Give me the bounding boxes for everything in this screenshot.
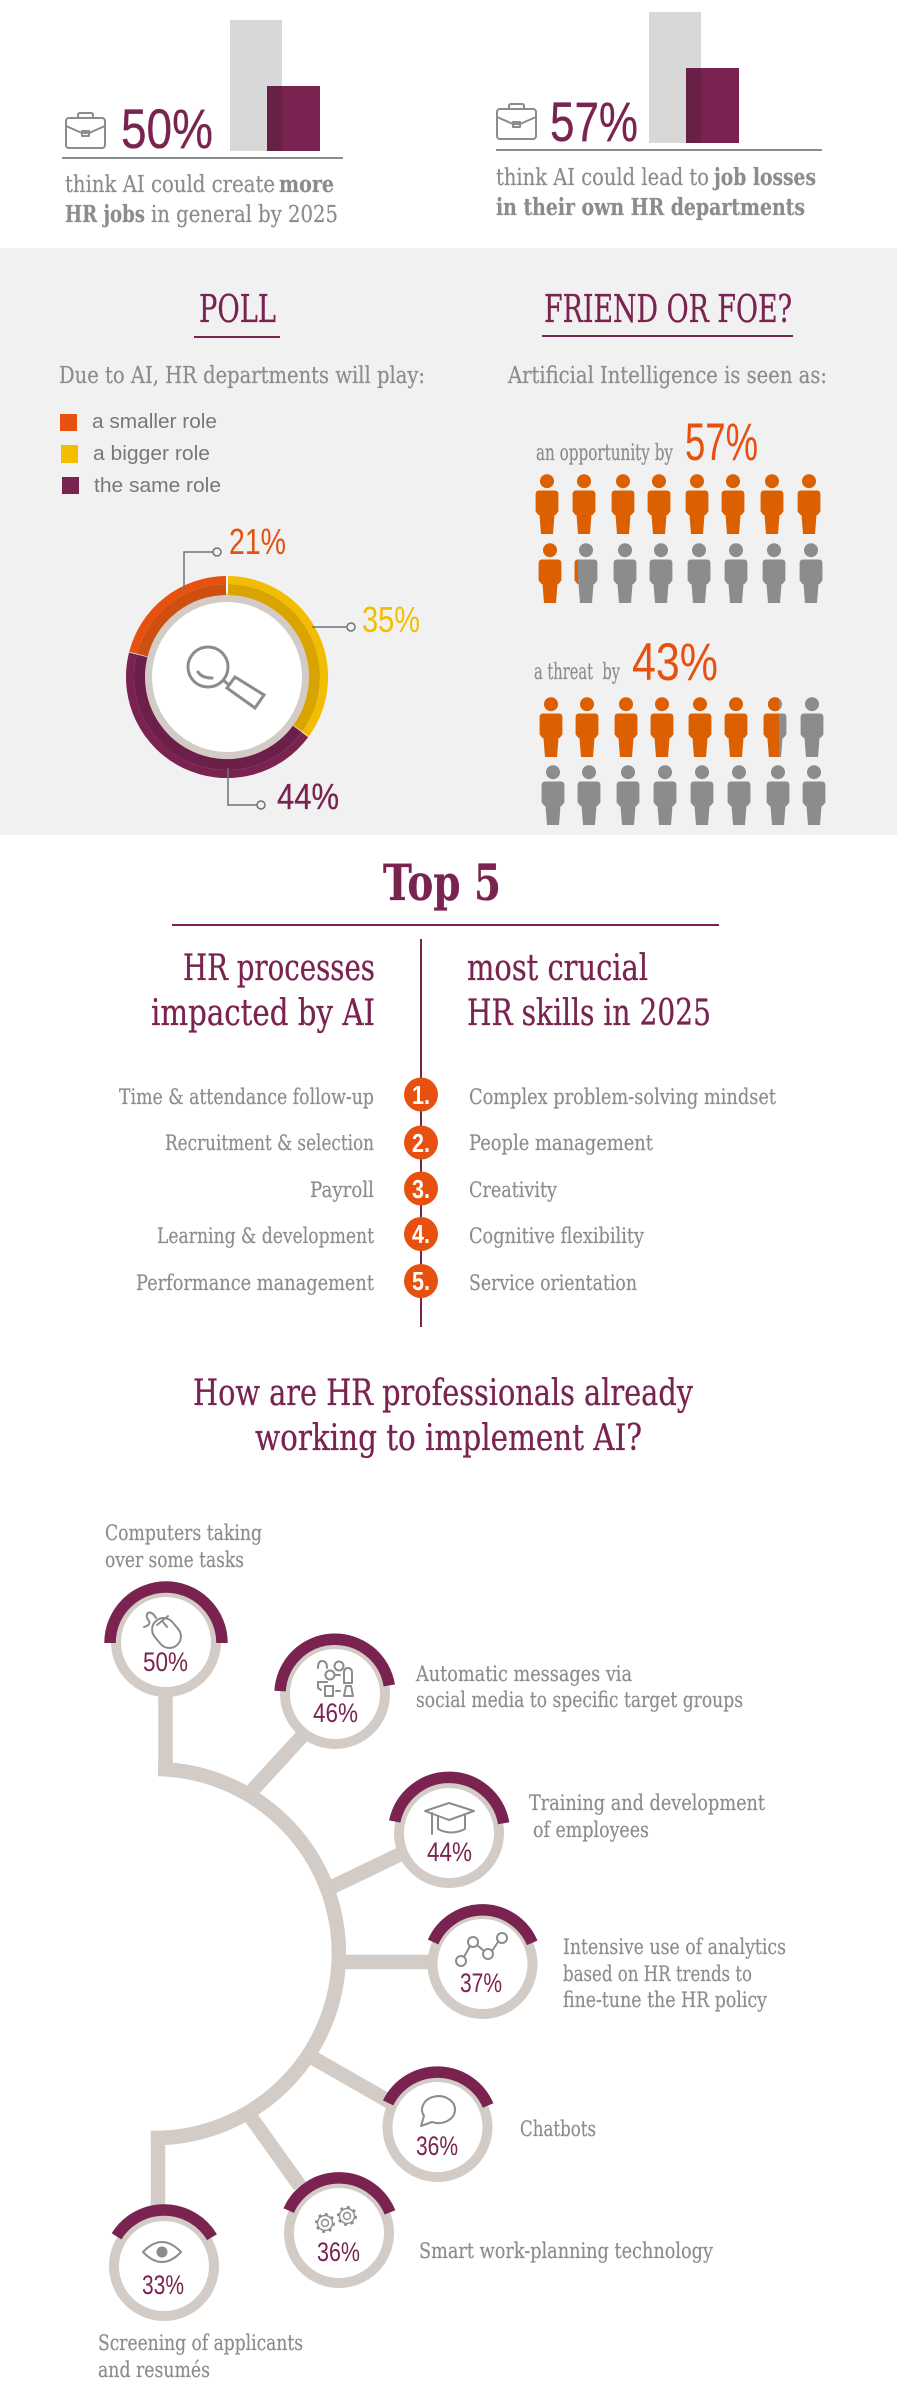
icon: line graph — [456, 1933, 507, 1966]
label: analytics: fine-tune the HR policy — [563, 1988, 768, 2013]
number badges: 3. — [412, 1174, 430, 1204]
description: job losses: in their own HR departments — [496, 194, 805, 221]
node: 50% computers — [110, 1587, 222, 1692]
node: 36% work planning — [289, 2178, 390, 2283]
callout: 44% — [228, 768, 339, 817]
label: opportunity 57%: an opportunity by — [536, 441, 673, 466]
column heading: HR processes: HR processes — [183, 948, 375, 989]
list: processes: Time & attendance follow-up — [119, 1085, 374, 1110]
list: skills: People management — [469, 1131, 653, 1156]
node: 44% training — [395, 1777, 504, 1883]
section: Top 5 — [119, 853, 776, 1327]
icon: magnifier — [188, 647, 264, 708]
donut chart — [130, 580, 324, 774]
label: messages: Automatic messages via — [415, 1662, 632, 1687]
list: skills: Creativity — [469, 1178, 558, 1203]
value: 50%: 50% — [121, 97, 213, 160]
callout: 21%: 21% — [229, 521, 286, 562]
icon: eye — [143, 2242, 181, 2262]
node: 37% analytics: 37% — [460, 1968, 502, 1998]
number badges — [404, 1078, 438, 1298]
segment: smaller role 21% — [133, 580, 226, 655]
panel: poll and friend or foe — [0, 248, 897, 835]
label: training: of employees — [533, 1818, 649, 1843]
node: 37% analytics — [432, 1910, 532, 2014]
legend: a bigger role — [93, 443, 210, 465]
diagram: tree of AI uses — [98, 1521, 786, 2383]
stat: 57% job losses — [496, 12, 822, 221]
pictogram: threat people — [540, 697, 825, 825]
icon: graduation cap — [425, 1803, 474, 1834]
node: 33% screening — [114, 2210, 214, 2316]
heading: FRIEND OR FOE?: FRIEND OR FOE? — [544, 287, 792, 331]
list: processes — [119, 1085, 374, 1296]
segment: same role 44% — [130, 654, 305, 774]
node: 36% chatbots — [388, 2072, 488, 2177]
description: more HR jobs: in general by 2025 — [151, 202, 338, 228]
icon: briefcase — [497, 104, 536, 139]
callout: 44%: 44% — [277, 776, 339, 817]
subheading: poll question: Due to AI, HR departments will play: — [59, 363, 425, 389]
column heading: crucial skills — [467, 948, 711, 1034]
column heading: crucial skills: most crucial — [467, 948, 648, 989]
description: more HR jobs: HR jobs — [65, 201, 145, 228]
label: training: Training and development — [529, 1791, 765, 1816]
label: messages: social media to specific target groups — [416, 1688, 743, 1713]
icon: gears — [316, 2207, 356, 2232]
label: training — [529, 1791, 765, 1843]
subheading: seen as: Artificial Intelligence is seen as: — [507, 363, 827, 389]
description: more HR jobs: more — [279, 171, 334, 198]
label: analytics — [563, 1935, 786, 2013]
node: 33% screening: 33% — [142, 2270, 184, 2300]
description: more HR jobs — [65, 171, 338, 228]
legend — [60, 411, 221, 497]
label: screening: and resumés — [98, 2358, 210, 2383]
label: analytics: based on HR trends to — [563, 1962, 752, 1987]
number badges: 1. — [412, 1080, 430, 1110]
node: 46% messages — [280, 1639, 389, 1744]
list: processes: Learning & development — [157, 1224, 374, 1249]
number badges: 4. — [412, 1219, 430, 1249]
list: skills: Cognitive flexibility — [469, 1224, 645, 1249]
list: processes: Recruitment & selection — [165, 1131, 374, 1156]
column heading: crucial skills: HR skills in 2025 — [467, 993, 711, 1034]
list: skills: Complex problem-solving mindset — [469, 1085, 776, 1110]
callout: 35% — [312, 599, 420, 640]
bar chart: 57% — [649, 12, 739, 143]
description: more HR jobs: think AI could create — [65, 172, 275, 198]
bar chart: 50% — [230, 20, 320, 151]
heading: how are HR professionals implementing AI — [193, 1373, 694, 1459]
legend: the same role — [94, 475, 221, 497]
label: screening — [98, 2331, 303, 2383]
node: 44% training: 44% — [427, 1837, 472, 1867]
label: messages — [415, 1662, 743, 1713]
stat: 50% more HR jobs — [62, 20, 343, 228]
heading: how are HR professionals implementing AI: How are HR professionals already — [193, 1373, 694, 1414]
label: chatbots: Chatbots — [520, 2117, 596, 2142]
column heading: HR processes — [151, 948, 375, 1034]
description: job losses: think AI could lead to — [496, 165, 709, 191]
description: job losses — [496, 164, 816, 221]
label: opportunity 57% — [536, 413, 758, 472]
icon: people — [318, 1661, 353, 1696]
list: skills: Service orientation — [469, 1271, 637, 1296]
list: processes: Performance management — [136, 1271, 374, 1296]
heading: Top 5: Top 5 — [383, 853, 501, 912]
trunk arc and branches — [151, 1690, 430, 2210]
list: processes: Payroll — [310, 1178, 374, 1203]
label: computers: Computers taking — [105, 1521, 262, 1546]
callout: 21% — [184, 521, 286, 590]
label: computers: over some tasks — [105, 1548, 244, 1573]
description: job losses: job losses — [712, 164, 816, 191]
value: 57%: 57% — [550, 90, 638, 153]
icon: briefcase — [66, 113, 105, 148]
heading: POLL: POLL — [199, 287, 276, 331]
number badges: 2. — [412, 1128, 430, 1158]
icon: mouse — [144, 1613, 186, 1653]
label: threat 43%: 43% — [632, 633, 718, 692]
node: 36% chatbots: 36% — [416, 2131, 458, 2161]
column heading: HR processes: impacted by AI — [151, 993, 375, 1034]
segment: bigger role 35% — [228, 580, 324, 734]
node: 36% work planning: 36% — [317, 2237, 360, 2267]
label: analytics: Intensive use of analytics — [563, 1935, 786, 1960]
pictogram: opportunity people — [536, 474, 822, 603]
label: opportunity 57%: 57% — [685, 413, 758, 472]
label: computers — [105, 1521, 262, 1573]
heading: how are HR professionals implementing AI: working to implement AI? — [255, 1418, 642, 1459]
callout: 35%: 35% — [362, 599, 420, 640]
label: threat 43%: a threat by — [534, 660, 620, 685]
label: work planning: Smart work-planning technology — [419, 2239, 714, 2264]
icon: speech bubble — [421, 2096, 455, 2126]
node: 50% computers: 50% — [143, 1647, 188, 1677]
node: 46% messages: 46% — [313, 1698, 358, 1728]
label: screening: Screening of applicants — [98, 2331, 303, 2356]
label: threat 43% — [534, 633, 718, 692]
number badges: 5. — [412, 1266, 430, 1296]
legend: a smaller role — [92, 411, 217, 433]
list: skills — [469, 1085, 776, 1296]
